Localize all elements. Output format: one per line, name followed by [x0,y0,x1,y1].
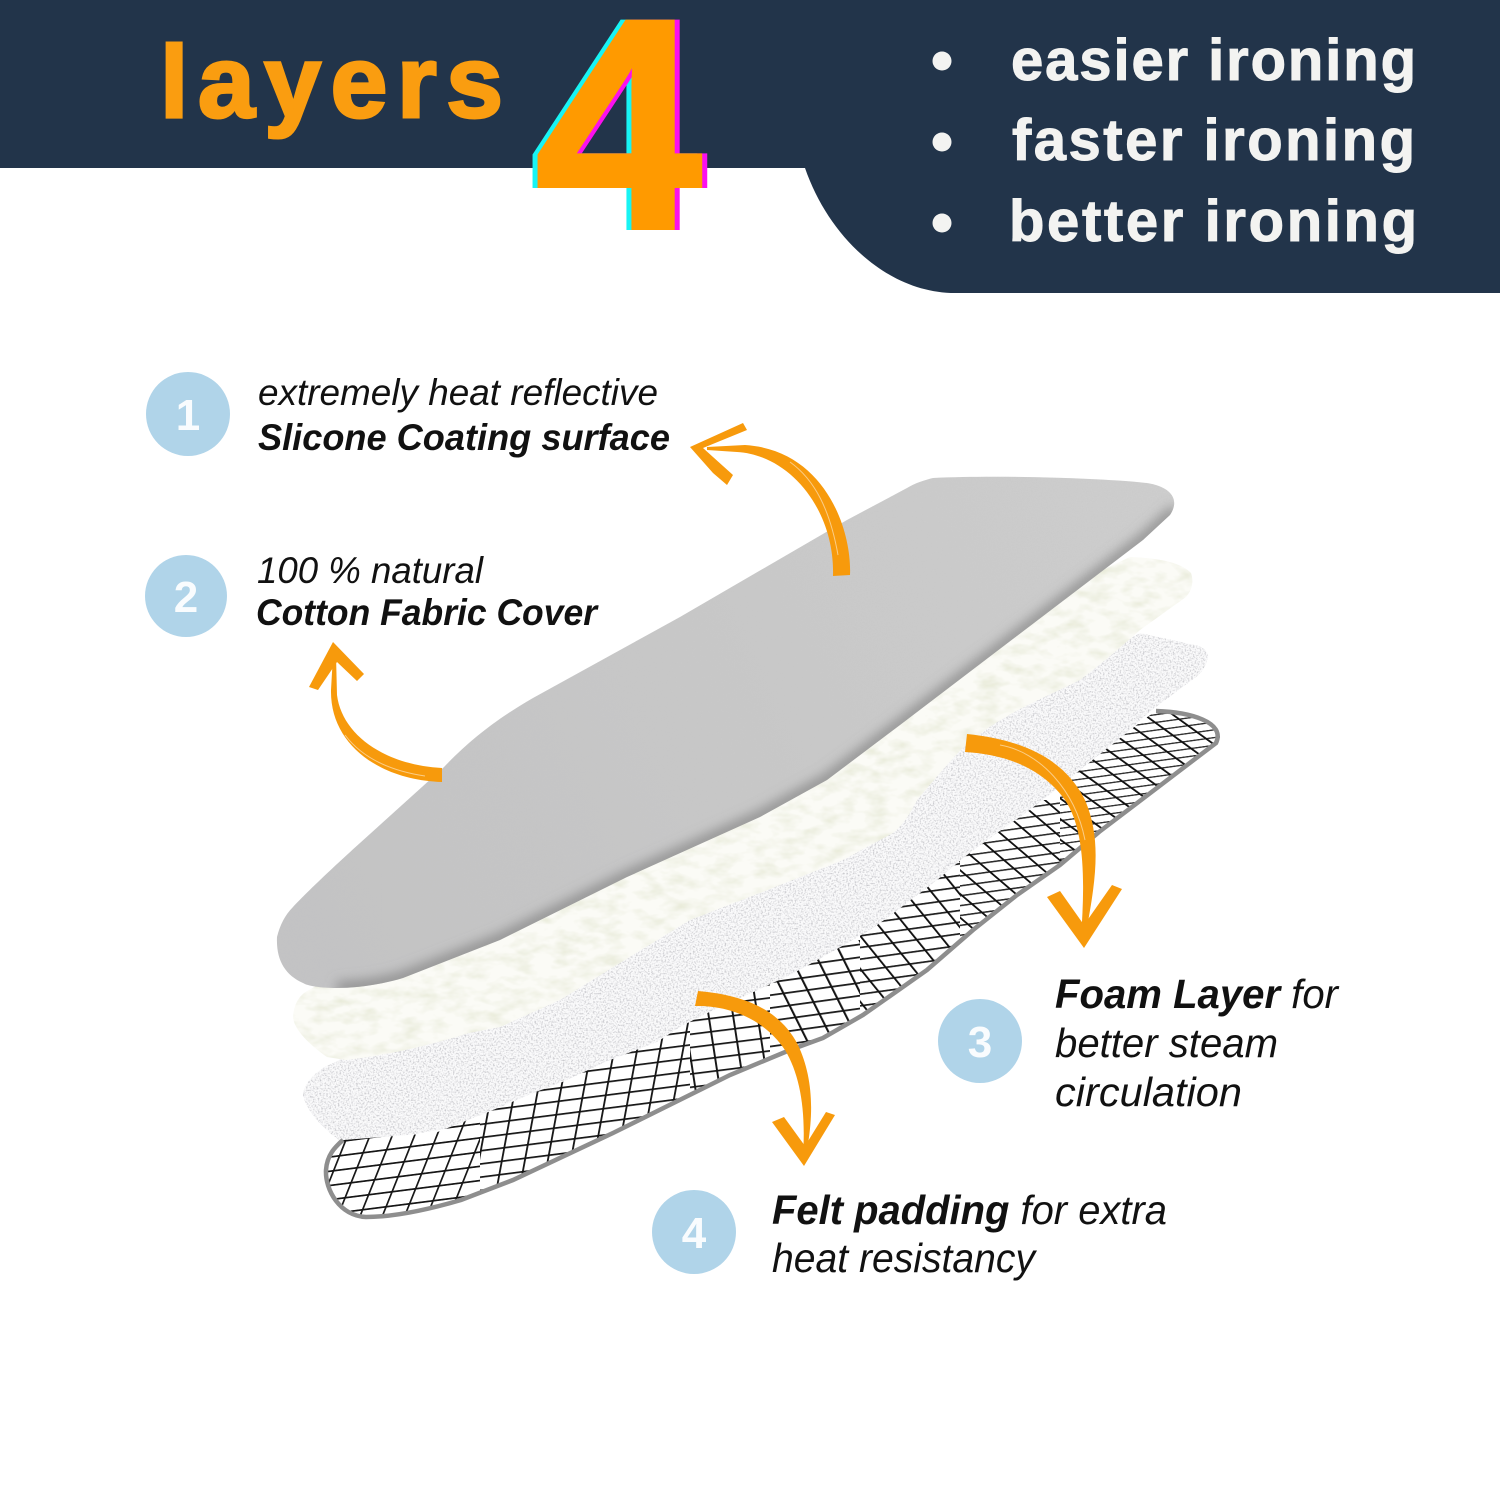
layer: silicone coated top surface [277,477,1176,988]
ironing board layers illustration [277,477,1230,1230]
badge 1 [146,372,230,456]
layer: foam [293,557,1192,1060]
callout 2 [145,550,599,637]
text: foam layer [1055,971,1340,1115]
text: silicone coating: extremely heat reflective [258,372,658,413]
text: cotton cover: Cotton Fabric Cover [256,592,599,633]
bullet: easier ironing: easier ironing [1011,28,1416,93]
badge 4 [652,1190,736,1274]
header band [0,0,1500,293]
text: foam layer: better steam [1055,1020,1278,1066]
layer: felt padding [303,633,1208,1145]
callout 3 [938,971,1340,1115]
text: foam layer: Foam Layer for [1055,971,1340,1017]
heading: layers: layers [160,25,503,139]
text: felt padding: heat resistancy [772,1235,1037,1281]
badge 2 [145,555,227,637]
arrow: layer 2 [309,642,442,782]
text: foam layer: circulation [1055,1069,1242,1115]
callout 4 [652,1187,1167,1281]
bullet: faster ironing: faster ironing [1012,108,1415,173]
text: cotton cover: 100 % natural [257,550,485,591]
badge 3 [938,999,1022,1083]
badge 2: 2 [174,573,198,622]
arrow: layer 4 [695,991,835,1166]
layer: net mesh [310,700,1230,1230]
text: felt padding: Felt padding for extra [772,1187,1167,1233]
callout 1 [146,372,670,458]
text: silicone coating [258,372,670,458]
benefit list [932,28,1417,254]
badge 1: 1 [176,391,200,440]
text: felt padding [772,1187,1167,1281]
arrow: layer 1 [690,423,850,576]
text: cotton cover [256,550,599,633]
badge 3: 3 [968,1018,992,1067]
badge 4: 4 [682,1209,707,1258]
arrow: layer 3 [965,734,1122,948]
text: silicone coating: Slicone Coating surface [258,417,670,458]
bullet: better ironing: better ironing [1009,189,1417,254]
